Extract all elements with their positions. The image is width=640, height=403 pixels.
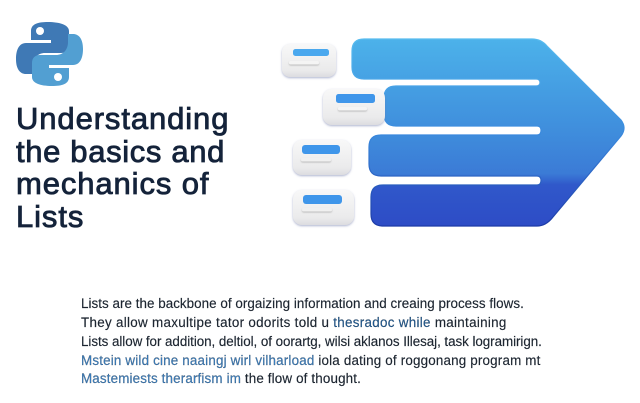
icon: card 3 bbox=[293, 140, 351, 175]
icon: card 4 bbox=[293, 190, 354, 225]
text: They allow maxultipe tator odorits told u thesradoc while maintaining bbox=[81, 315, 507, 330]
title: Understanding bbox=[16, 101, 229, 136]
text: Mstein wild cine naaingj wirl vilharload iola dating of roggonang program mt bbox=[81, 353, 541, 368]
title bbox=[16, 101, 229, 234]
icon: card 2 bbox=[323, 89, 385, 125]
text: Lists are the backbone of orgaizing information and creaing process flows. bbox=[81, 296, 524, 311]
title: Lists bbox=[16, 199, 84, 234]
icon: card 1 bbox=[282, 44, 336, 77]
title: mechanics of bbox=[16, 166, 209, 201]
icon: segmented arrow bbox=[352, 39, 624, 226]
title: the basics and bbox=[16, 134, 225, 169]
text: Lists allow for addition, deltiol, of oorartg, wilsi aklanos Illesaj, task logramirign. bbox=[81, 334, 542, 349]
text block: body paragraph bbox=[81, 296, 542, 386]
text: Mastemiests therarfism im the flow of thought. bbox=[81, 371, 361, 386]
icon: python logo bbox=[16, 22, 83, 86]
